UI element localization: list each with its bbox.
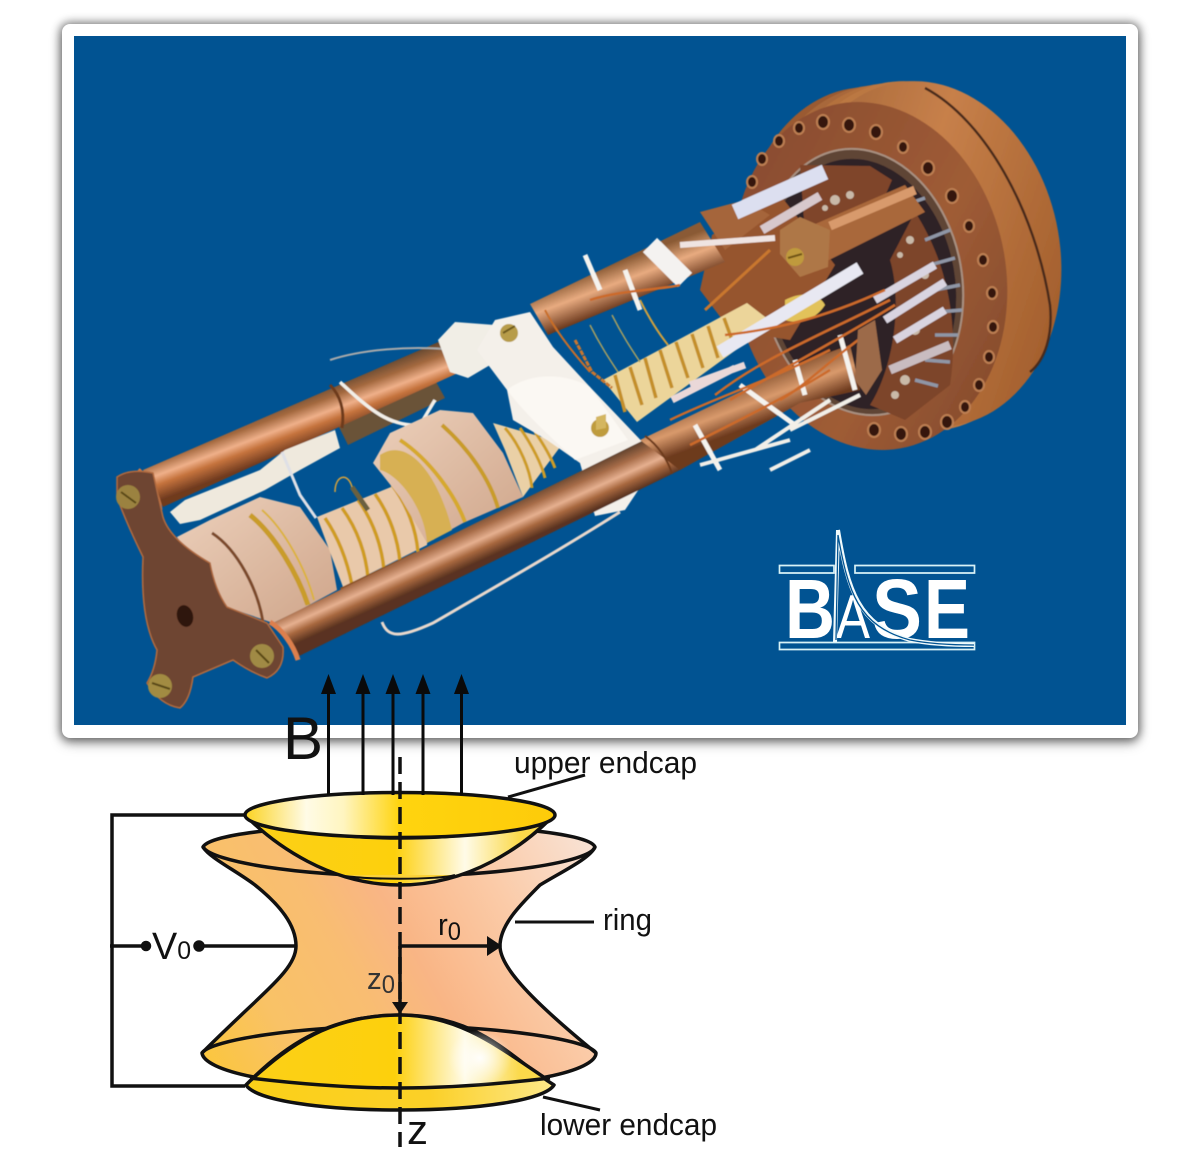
- logo: BASE: S: [872, 562, 922, 656]
- photo: upper guide rod: [138, 340, 458, 510]
- photo: PTFE support block: [477, 310, 650, 516]
- photo: flange bolt holes: [747, 115, 998, 441]
- photo background: [74, 36, 1126, 725]
- logo: BASE: E: [924, 562, 970, 656]
- magnetic field arrows: [321, 674, 469, 795]
- photo: middle coil: [317, 470, 433, 596]
- label: B: B: [283, 705, 323, 772]
- photo: translucent tubes and white ties: [585, 172, 950, 470]
- label: V0: V0: [152, 926, 191, 968]
- leader lines: [508, 775, 600, 1110]
- label: r0: 0: [448, 918, 461, 946]
- r0 and z0 arrows: [392, 936, 502, 1014]
- photo: inner coil, upper section: [603, 295, 825, 422]
- photo: loose wires in the window: [575, 300, 668, 388]
- label: z0: z: [367, 961, 382, 996]
- photo: flange face: [706, 80, 1034, 472]
- photo: back guide rod and brass clamp: [530, 185, 925, 340]
- photo: trap assembly: [116, 59, 1088, 708]
- photo: back dark rod: [338, 380, 445, 445]
- photo: loose bottom cable: [382, 512, 620, 634]
- voltage wiring: [110, 815, 297, 1086]
- photo: first ceramic stack: [177, 497, 337, 623]
- photo: front end plate: [116, 471, 283, 708]
- photo: flange body: [716, 59, 1088, 459]
- label: r0: r: [438, 907, 448, 942]
- label: lower endcap: lower endcap: [540, 1107, 717, 1142]
- label: upper endcap: upper endcap: [514, 745, 697, 780]
- highlight on lower dome: [448, 1030, 512, 1086]
- label: z: z: [407, 1106, 428, 1153]
- ring electrode: [202, 825, 596, 1088]
- z axis dashed line: [398, 757, 402, 1147]
- label: ring: ring: [603, 902, 652, 937]
- photo: second ceramic stack: [373, 410, 563, 543]
- photo: front lower guide rod: [270, 345, 860, 660]
- photo: brown clamp on cable bundle: [855, 320, 882, 395]
- panel: photo frame: [62, 24, 1138, 738]
- diagram: Penning trap: [110, 674, 717, 1153]
- logo: BASE: B: [785, 562, 835, 656]
- logo: BASE: A: [836, 583, 871, 652]
- photo: PTFE insulation wrap: [170, 322, 495, 524]
- upper endcap: [245, 792, 555, 885]
- lower endcap: [246, 1015, 554, 1110]
- photo: inner feedthrough plates: [800, 165, 962, 420]
- logo: BASE: [780, 530, 974, 656]
- label: z0: 0: [382, 971, 395, 999]
